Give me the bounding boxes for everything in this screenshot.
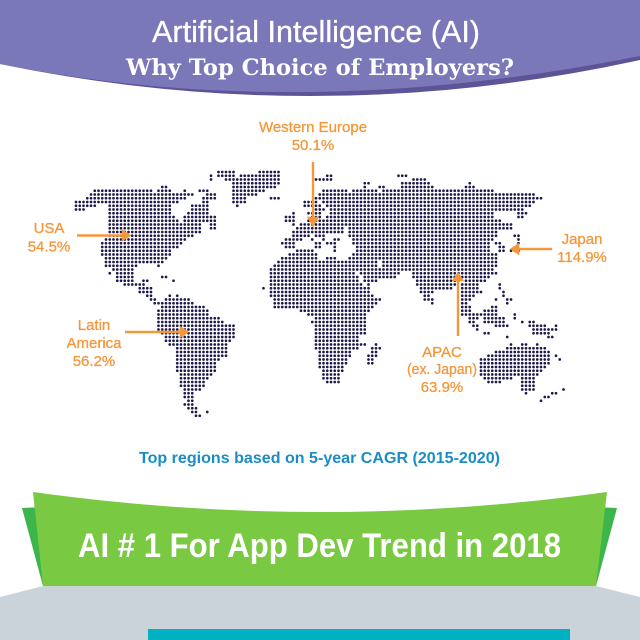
subtitle: Why Top Choice of Employers? bbox=[125, 55, 514, 81]
arrow: USA bbox=[77, 232, 129, 240]
arrow: Latin America bbox=[125, 328, 187, 336]
label: USA: 54.5% bbox=[28, 238, 70, 256]
grey panel bbox=[0, 586, 640, 640]
label: Latin America: Latin bbox=[78, 317, 110, 334]
label: Latin America bbox=[66, 317, 122, 370]
label: Western Europe bbox=[259, 119, 367, 154]
label: Latin America: 56.2% bbox=[73, 353, 115, 370]
title: Artificial Intelligence (AI) bbox=[152, 14, 480, 49]
arrow: Western Europe bbox=[309, 162, 317, 225]
label: USA bbox=[28, 220, 70, 256]
dotted world map bbox=[76, 172, 564, 416]
label: APAC bbox=[407, 344, 477, 396]
teal panel bbox=[148, 629, 570, 640]
label: USA: USA bbox=[34, 220, 64, 237]
label: APAC: (ex. Japan) bbox=[407, 361, 477, 378]
label: Western Europe: 50.1% bbox=[292, 137, 334, 154]
header banner bbox=[0, 0, 640, 96]
green ribbon bbox=[22, 492, 617, 586]
label: Japan: 114.9% bbox=[557, 249, 607, 266]
arrow: APAC bbox=[454, 274, 462, 336]
label: Japan bbox=[557, 231, 607, 266]
label: Japan: Japan bbox=[562, 231, 602, 248]
label: APAC: 63.9% bbox=[421, 379, 463, 396]
arrow: Japan bbox=[512, 245, 552, 253]
label: Western Europe: Western Europe bbox=[259, 119, 367, 136]
ribbon title: AI # 1 For App Dev Trend in 2018 bbox=[78, 527, 561, 565]
label: APAC: APAC bbox=[422, 344, 462, 361]
label: Latin America: America bbox=[66, 335, 122, 352]
map caption: Top regions based on 5-year CAGR (2015-2020) bbox=[139, 450, 500, 467]
